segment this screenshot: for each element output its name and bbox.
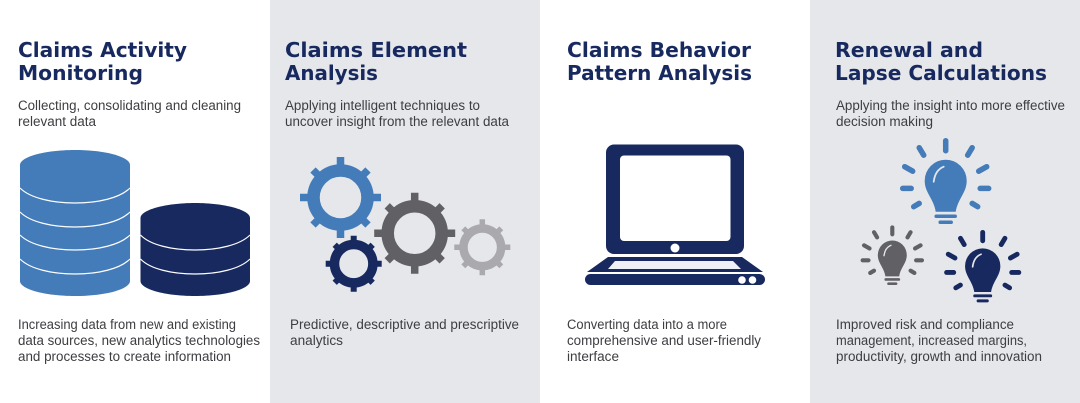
text: behavior detail: interface (567, 349, 619, 364)
icon: gray light bulb (863, 227, 922, 284)
heading: claims activity monitoring: Claims Activity (18, 38, 187, 62)
text: element description (285, 98, 509, 129)
text: activity detail: and processes to create information (18, 349, 231, 364)
text: renewal description: Applying the insight into more effective (836, 98, 1065, 113)
text: renewal description (836, 98, 1065, 129)
heading: renewal and lapse calculations (835, 38, 1047, 85)
text: renewal detail: productivity, growth and innovation (836, 349, 1042, 364)
panel: claims element analysis (270, 0, 540, 403)
text: activity detail: data sources, new analytics technologies (18, 333, 260, 348)
heading: claims activity monitoring: Monitoring (18, 61, 143, 85)
text: renewal detail (836, 317, 1042, 364)
icon: blue light bulb (903, 141, 989, 222)
heading: renewal and lapse calculations: Lapse Calculations (835, 61, 1047, 85)
text: behavior detail (567, 317, 761, 364)
icon: navy gear (326, 236, 382, 292)
panel: renewal and lapse calculations (810, 0, 1080, 403)
panel: claims behavior pattern analysis (540, 0, 810, 403)
text: element detail (290, 317, 519, 348)
text: renewal detail: Improved risk and compliance (836, 317, 1014, 332)
text: activity description: Collecting, consolidating and cleaning (18, 98, 241, 113)
icon: navy light bulb (947, 232, 1019, 301)
text: behavior detail: Converting data into a more (567, 317, 727, 332)
icon: large blue database (20, 150, 130, 296)
icon: dark gray gear (374, 193, 455, 274)
text: behavior detail: comprehensive and user-friendly (567, 333, 761, 348)
text: renewal detail: management, increased margins, (836, 333, 1027, 348)
heading: claims behavior pattern analysis: Pattern Analysis (567, 61, 752, 85)
panel: claims activity monitoring (0, 0, 270, 403)
text: element description: Applying intelligent techniques to (285, 98, 480, 113)
heading: claims element analysis (285, 38, 467, 85)
heading: claims element analysis: Analysis (285, 61, 378, 85)
heading: claims behavior pattern analysis: Claims Behavior (567, 38, 752, 62)
text: activity detail: Increasing data from new and existing (18, 317, 236, 332)
icon: light gray gear (454, 219, 510, 275)
heading: claims behavior pattern analysis (567, 38, 752, 85)
icon: small navy database (140, 203, 250, 296)
heading: renewal and lapse calculations: Renewal and (835, 38, 983, 62)
heading: claims element analysis: Claims Element (285, 38, 467, 62)
heading: claims activity monitoring (18, 38, 187, 85)
text: activity description: relevant data (18, 114, 96, 129)
text: element detail: Predictive, descriptive and prescriptive (290, 317, 519, 332)
text: element description: uncover insight from the relevant data (285, 114, 509, 129)
icon: laptop (585, 144, 765, 285)
text: activity description (18, 98, 241, 129)
text: element detail: analytics (290, 333, 343, 348)
text: renewal description: decision making (836, 114, 933, 129)
icon: blue gear (300, 157, 381, 238)
text: activity detail (18, 317, 260, 364)
